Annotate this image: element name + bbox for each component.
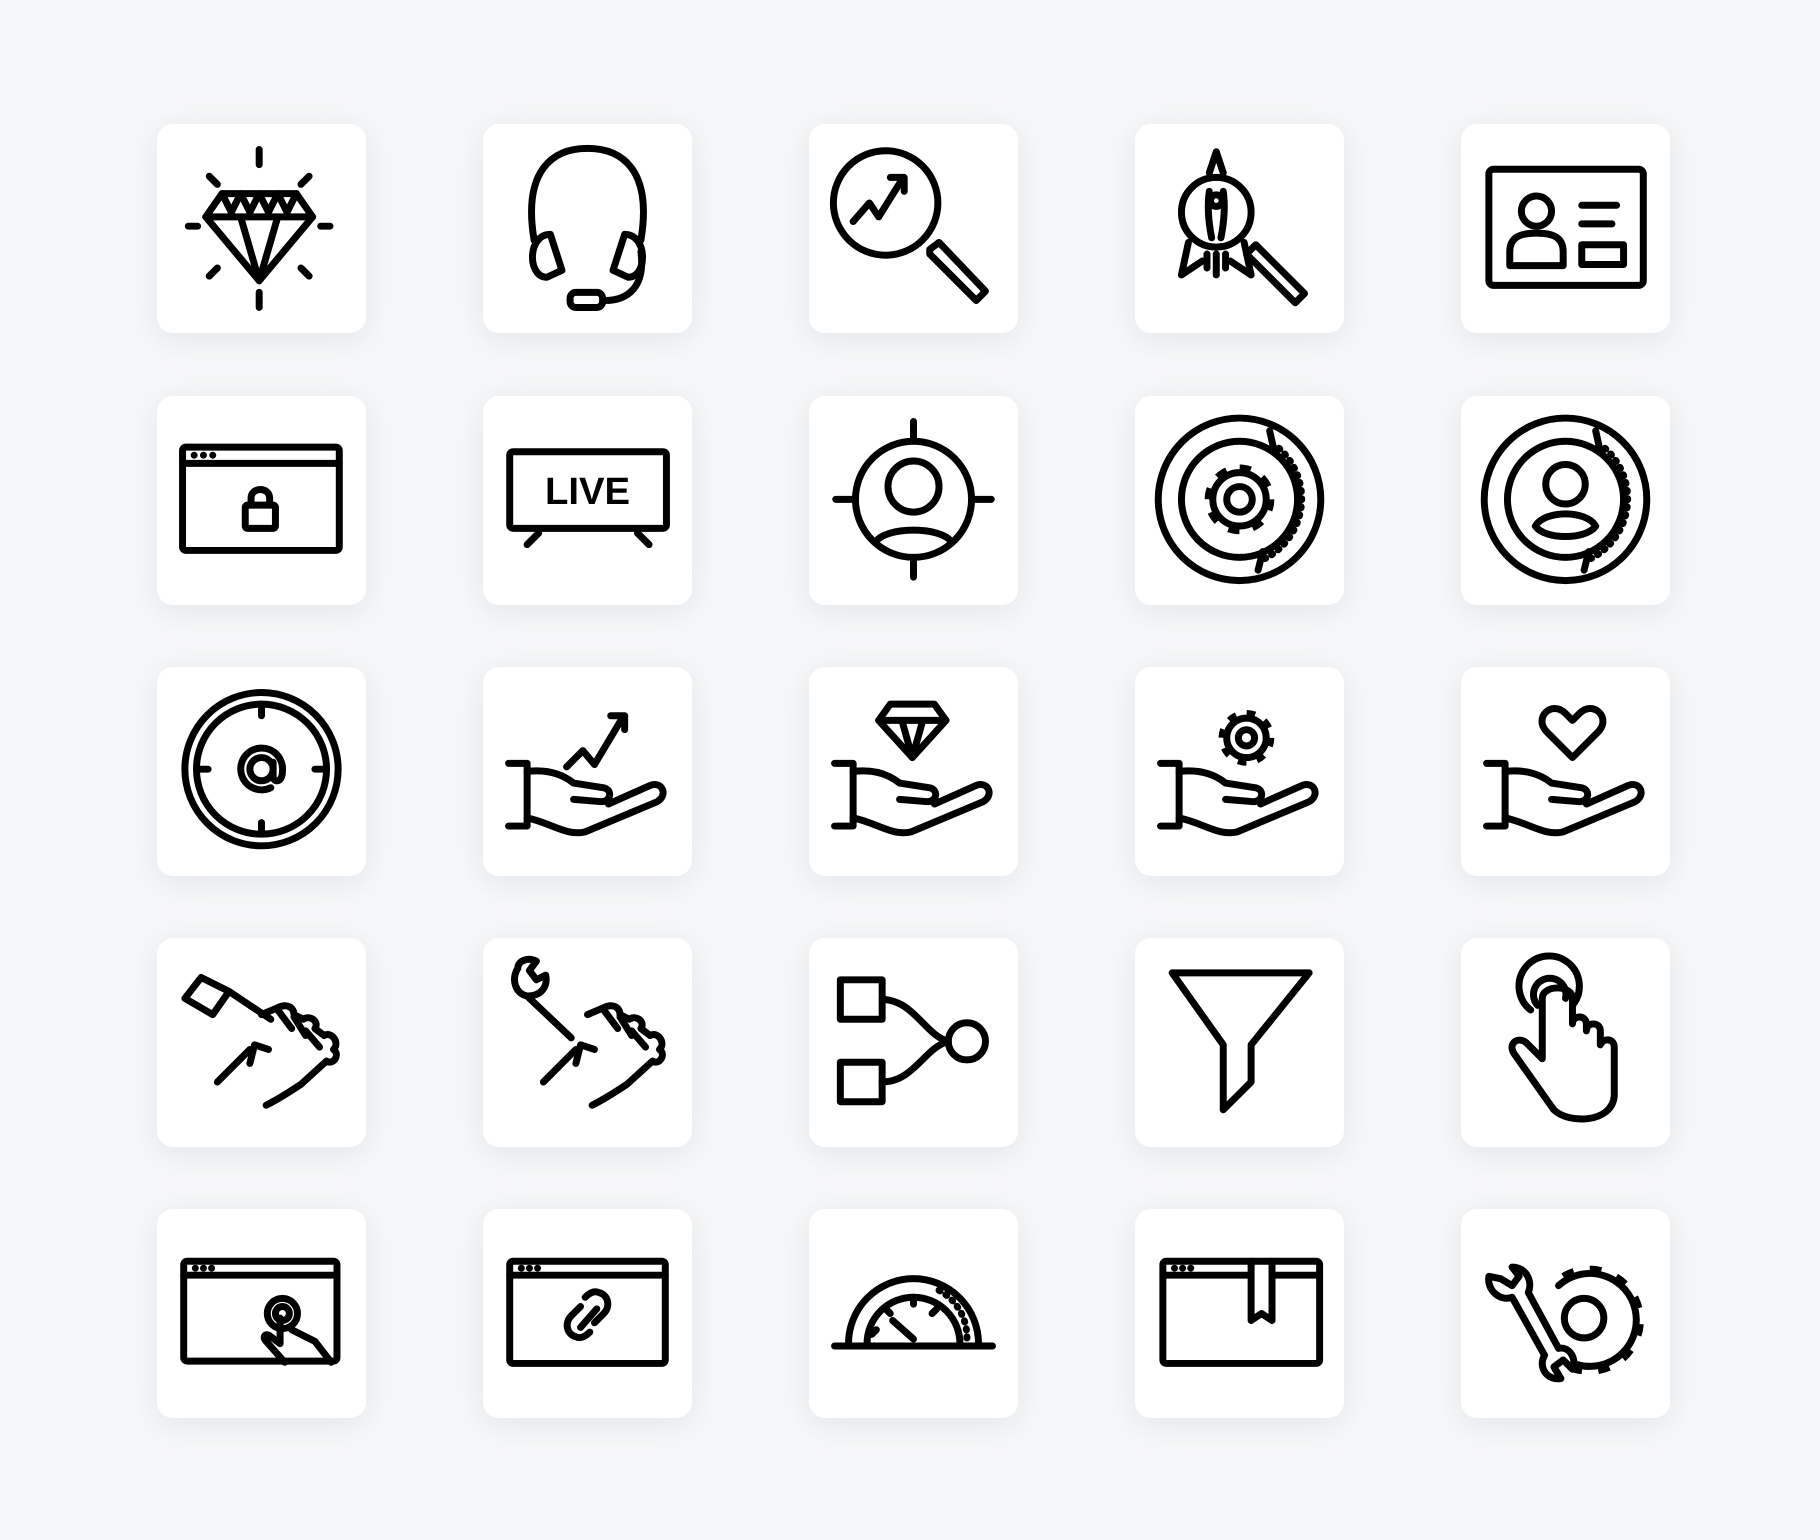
icon: hand with growth arrow bbox=[509, 716, 663, 833]
tile: gear circle bbox=[1135, 396, 1344, 605]
tile: gauge bbox=[809, 1209, 1018, 1418]
icon: targeted user bbox=[836, 422, 991, 577]
icon: flow nodes bbox=[840, 980, 985, 1102]
icon: email target bbox=[185, 693, 338, 846]
icon: browser with bookmark bbox=[1163, 1261, 1320, 1363]
tile: ID card bbox=[1461, 124, 1670, 333]
icon: rocket with magnifier bbox=[1181, 152, 1305, 303]
tile: browser bookmark bbox=[1135, 1209, 1344, 1418]
tile: hand growth bbox=[483, 667, 692, 876]
tile: rocket search bbox=[1135, 124, 1344, 333]
icon: sparkling diamond bbox=[188, 150, 330, 307]
tile: tap bbox=[1461, 938, 1670, 1147]
icon: gear progress circle bbox=[1158, 418, 1321, 581]
icon: hand with heart bbox=[1487, 709, 1641, 833]
icon: user progress circle bbox=[1484, 418, 1647, 581]
icon: hand with diamond bbox=[835, 704, 989, 833]
icon: browser with link bbox=[510, 1261, 665, 1363]
icon: browser with lock bbox=[183, 447, 339, 550]
tile: funnel bbox=[1135, 938, 1344, 1147]
tile: diamond bbox=[157, 124, 366, 333]
icon: hand holding wrench bbox=[515, 959, 662, 1105]
tile: hand flag bbox=[157, 938, 366, 1147]
tile: wrench gear bbox=[1461, 1209, 1670, 1418]
tile: hand heart bbox=[1461, 667, 1670, 876]
icon: live TV: LIVE bbox=[545, 470, 630, 513]
icon: headset bbox=[532, 148, 643, 307]
icon: speed gauge bbox=[835, 1279, 992, 1346]
tile: hand gear bbox=[1135, 667, 1344, 876]
icon: live TV bbox=[510, 452, 666, 545]
tile: at target bbox=[157, 667, 366, 876]
tile: user circle bbox=[1461, 396, 1670, 605]
tile: live tv bbox=[483, 396, 692, 605]
icon: funnel filter bbox=[1172, 973, 1309, 1110]
tile: target person bbox=[809, 396, 1018, 605]
tile: browser link bbox=[483, 1209, 692, 1418]
tile: browser lock bbox=[157, 396, 366, 605]
tile: hand wrench bbox=[483, 938, 692, 1147]
icon: hand with gear bbox=[1161, 713, 1315, 833]
tile: search growth bbox=[809, 124, 1018, 333]
icon: browser with tap bbox=[184, 1261, 337, 1362]
icon: ID card bbox=[1489, 169, 1643, 285]
tile: hand diamond bbox=[809, 667, 1018, 876]
icon: wrench and gear bbox=[1489, 1267, 1640, 1379]
tile: headset bbox=[483, 124, 692, 333]
icon: finger tap bbox=[1512, 956, 1614, 1119]
tile: flow diagram bbox=[809, 938, 1018, 1147]
icon: hand holding flag bbox=[185, 977, 336, 1105]
tile: browser tap bbox=[157, 1209, 366, 1418]
icon: magnifier with chart bbox=[833, 151, 985, 300]
